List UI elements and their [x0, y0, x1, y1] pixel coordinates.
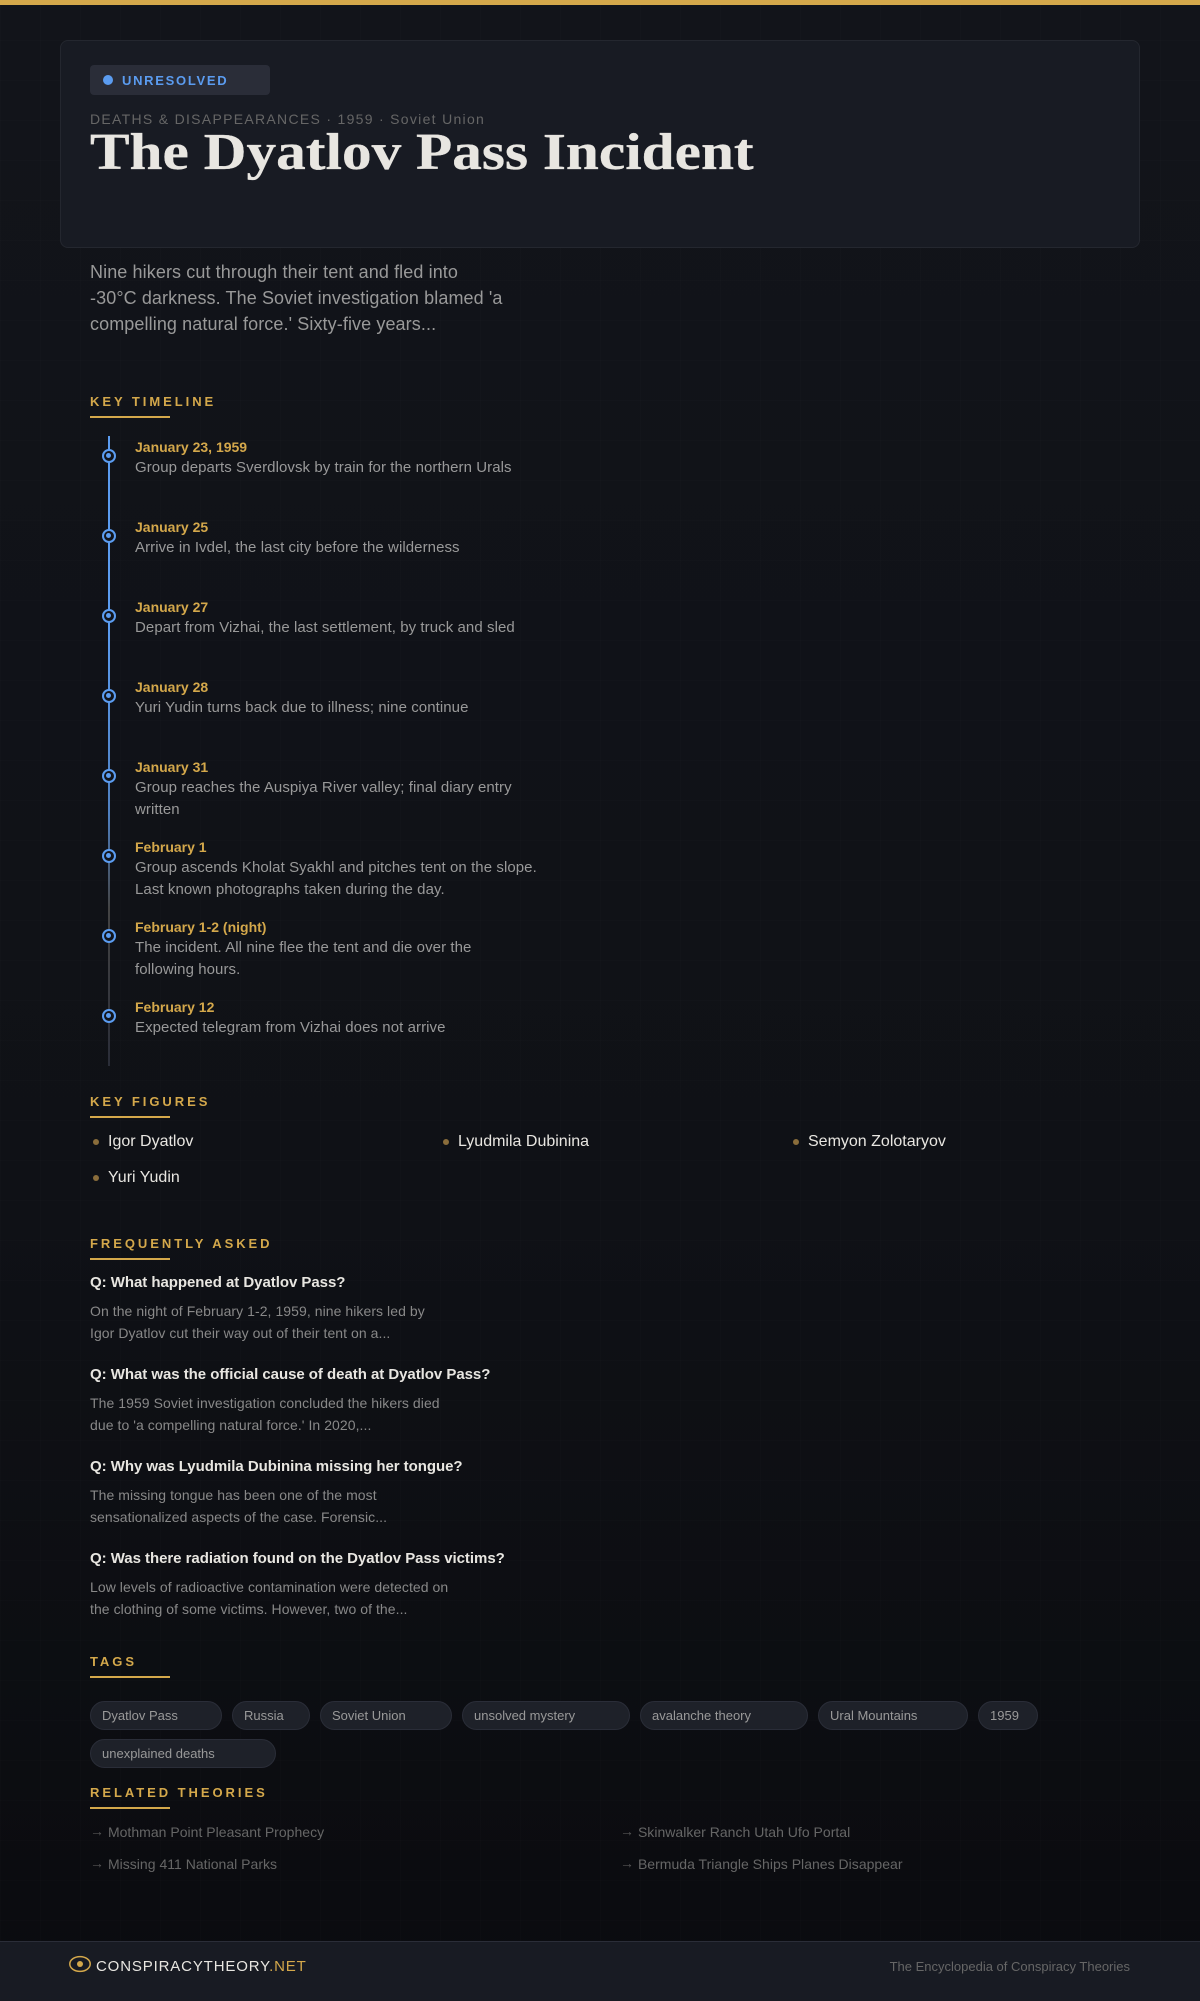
text: January 31	[135, 759, 208, 775]
timeline entry: January 25	[102, 529, 116, 543]
icon: eye logo	[69, 1956, 91, 1972]
tags	[90, 1701, 1038, 1768]
faq item 3: Q: Why was Lyudmila Dubinina missing her tongue?	[90, 1458, 463, 1475]
text: Group reaches the Auspiya River valley; final diary entry written	[135, 779, 512, 818]
timeline entry: January 23, 1959	[102, 449, 116, 463]
heading: frequently asked: FREQUENTLY ASKED	[90, 1236, 273, 1251]
faq item 2	[90, 1366, 490, 1433]
related link: → Missing 411 National Parks	[90, 1855, 277, 1872]
tag: Soviet Union	[332, 1708, 406, 1723]
faq item 3	[90, 1458, 463, 1525]
status badge	[90, 65, 270, 95]
text: The incident. All nine flee the tent and die over the following hours.	[135, 939, 471, 978]
text: Arrive in Ivdel, the last city before the wilderness	[135, 539, 460, 556]
summary text: compelling natural force.' Sixty-five years...	[90, 314, 436, 334]
tag: avalanche theory	[652, 1708, 751, 1723]
timeline	[108, 436, 110, 1066]
timeline entry: January 31	[102, 769, 116, 783]
text: Group departs Sverdlovsk by train for the northern Urals	[135, 459, 512, 476]
tag: Dyatlov Pass	[102, 1708, 178, 1723]
faq item 4	[90, 1550, 505, 1617]
timeline entry: February 1-2 (night)	[102, 929, 116, 943]
tag: Russia	[244, 1708, 284, 1723]
faq item 2: The 1959 Soviet investigation concluded the hikers died due to 'a compelling natural force.' In 2020,...	[90, 1395, 440, 1433]
tag	[90, 1739, 276, 1768]
summary text: Nine hikers cut through their tent and fled into	[90, 262, 458, 282]
heading: key timeline: KEY TIMELINE	[90, 394, 216, 409]
category line: DEATHS & DISAPPEARANCES · 1959 · Soviet Union	[90, 111, 485, 127]
text: January 25	[135, 519, 208, 535]
tag: unexplained deaths	[102, 1746, 215, 1761]
faq item 2: Q: What was the official cause of death at Dyatlov Pass?	[90, 1366, 490, 1383]
tag	[818, 1701, 968, 1730]
tag	[462, 1701, 630, 1730]
text: January 23, 1959	[135, 439, 247, 455]
related link: → Skinwalker Ranch Utah Ufo Portal	[620, 1823, 850, 1840]
figure: Igor Dyatlov: Igor Dyatlov	[108, 1133, 193, 1150]
footer tagline: The Encyclopedia of Conspiracy Theories	[890, 1959, 1130, 1974]
faq item 3: The missing tongue has been one of the most sensationalized aspects of the case. Forensic...	[90, 1487, 387, 1525]
icon: status dot	[103, 75, 113, 85]
timeline entry: January 27	[102, 609, 116, 623]
figure: Yuri Yudin: Yuri Yudin	[108, 1169, 180, 1186]
timeline entry: February 12	[102, 1009, 116, 1023]
faq item 1	[90, 1274, 425, 1341]
heading: key figures: KEY FIGURES	[90, 1094, 210, 1109]
text: February 1	[135, 839, 207, 855]
tag: unsolved mystery	[474, 1708, 575, 1723]
faq item 1: On the night of February 1-2, 1959, nine hikers led by Igor Dyatlov cut their way out of their tent on a...	[90, 1303, 425, 1341]
title: The Dyatlov Pass Incident	[90, 124, 754, 181]
timeline entry: January 28	[102, 689, 116, 703]
text: February 1-2 (night)	[135, 919, 266, 935]
text: Yuri Yudin turns back due to illness; nine continue	[135, 699, 469, 716]
heading: related theories: RELATED THEORIES	[90, 1785, 268, 1800]
tag: 1959	[990, 1708, 1019, 1723]
tag	[90, 1701, 222, 1730]
text: January 28	[135, 679, 208, 695]
tag	[232, 1701, 310, 1730]
tag	[978, 1701, 1038, 1730]
text: Group ascends Kholat Syakhl and pitches tent on the slope. Last known photographs taken during the day.	[135, 859, 537, 898]
footer	[0, 1941, 1200, 2001]
tag	[320, 1701, 452, 1730]
summary text: -30°C darkness. The Soviet investigation blamed 'a	[90, 288, 503, 308]
summary text	[90, 262, 503, 334]
text: Depart from Vizhai, the last settlement, by truck and sled	[135, 619, 515, 636]
timeline rail	[108, 436, 110, 1066]
tag: Ural Mountains	[830, 1708, 917, 1723]
figure: Semyon Zolotaryov: Semyon Zolotaryov	[808, 1133, 946, 1150]
badge label: UNRESOLVED	[122, 72, 228, 88]
figure: Lyudmila Dubinina: Lyudmila Dubinina	[458, 1133, 589, 1150]
related link: → Mothman Point Pleasant Prophecy	[90, 1823, 324, 1840]
timeline entry: February 1	[102, 849, 116, 863]
logo wordmark: CONSPIRACYTHEORY.NET	[96, 1958, 307, 1975]
related link: → Bermuda Triangle Ships Planes Disappear	[620, 1855, 903, 1872]
panel: header card	[60, 40, 1140, 248]
text: February 12	[135, 999, 214, 1015]
faq item 4: Low levels of radioactive contamination were detected on the clothing of some victims. However, two of the...	[90, 1579, 448, 1617]
tag	[640, 1701, 808, 1730]
text: January 27	[135, 599, 208, 615]
text: Expected telegram from Vizhai does not arrive	[135, 1019, 446, 1036]
heading: tags: TAGS	[90, 1654, 137, 1669]
faq item 4: Q: Was there radiation found on the Dyatlov Pass victims?	[90, 1550, 505, 1567]
faq item 1: Q: What happened at Dyatlov Pass?	[90, 1274, 345, 1291]
top accent bar	[0, 0, 1200, 5]
